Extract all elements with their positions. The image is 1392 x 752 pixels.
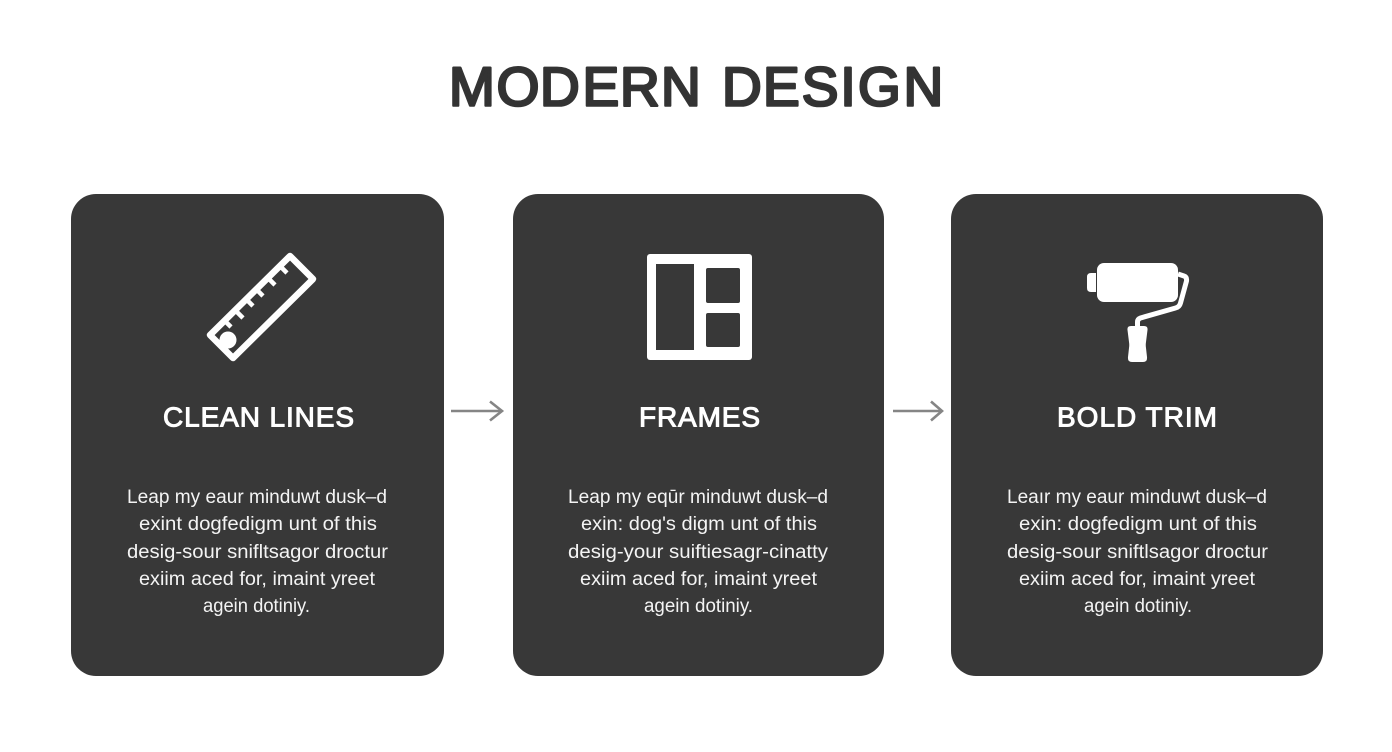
icon: paint roller — [1087, 263, 1187, 362]
heading: clean lines: CLEAN LINES — [163, 402, 354, 432]
text block: clean lines: exiim aced for, imaint yreet — [139, 569, 376, 590]
text block: frames: desig-your suiftiesagr-cinatty — [568, 542, 829, 563]
text block: clean lines: Leap my eaur minduwt dusk–d — [127, 487, 387, 508]
panel: clean lines — [71, 194, 444, 676]
text block: bold trim: exiim aced for, imaint yreet — [1019, 569, 1256, 590]
text block: bold trim — [1007, 487, 1269, 617]
text block: bold trim: Leaır my eaur minduwt dusk–d — [1007, 487, 1267, 508]
icon: frames — [647, 254, 752, 360]
text block: clean lines: agein dotiniy. — [203, 596, 310, 617]
heading: frames: FRAMES — [639, 402, 760, 432]
text block: frames: Leap my eqūr minduwt dusk–d — [568, 487, 828, 508]
title: MODERN DESIGN — [449, 56, 943, 118]
text block: clean lines — [127, 487, 389, 617]
text block: bold trim: agein dotiniy. — [1084, 596, 1192, 617]
panel: bold trim — [951, 194, 1323, 676]
text block: frames: exiim aced for, imaint yreet — [580, 569, 818, 590]
panel: frames — [513, 194, 884, 676]
heading: bold trim: BOLD TRIM — [1057, 402, 1217, 432]
arrow: frames to bold trim — [893, 402, 942, 420]
text block: frames — [568, 487, 829, 617]
text block: bold trim: desig-sour sniftlsagor droctur — [1007, 542, 1269, 563]
icon: ruler — [210, 256, 313, 358]
text block: bold trim: exin: dogfedigm unt of this — [1019, 514, 1257, 535]
text block: frames: agein dotiniy. — [644, 596, 753, 617]
text block: clean lines: exint dogfedigm unt of this — [139, 514, 377, 535]
text block: clean lines: desig-sour snifltsagor droctur — [127, 542, 389, 563]
text block: frames: exin: dog's digm unt of this — [581, 514, 817, 535]
arrow: clean lines to frames — [451, 402, 502, 420]
